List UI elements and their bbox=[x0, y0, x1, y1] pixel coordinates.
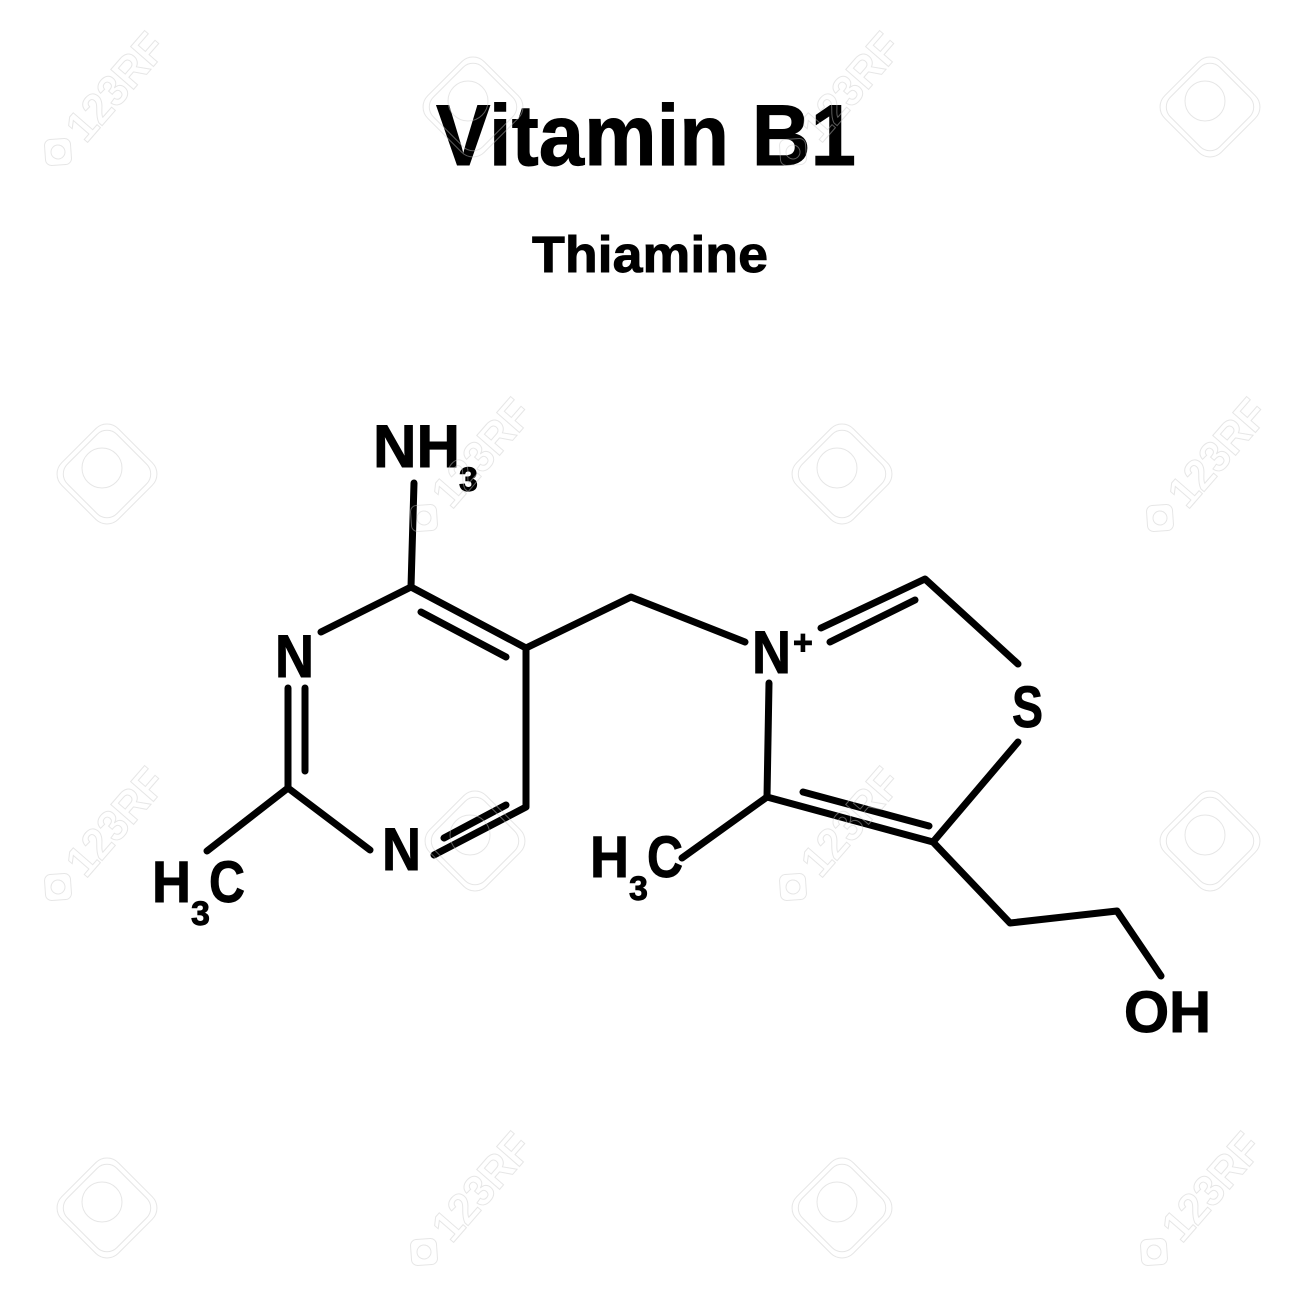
molecule bonds bbox=[207, 483, 1161, 976]
label: pyrimidine N lower: N bbox=[382, 816, 421, 883]
label: right H3C: H bbox=[590, 825, 629, 890]
label: right H3C: 3 bbox=[629, 870, 648, 908]
watermarks: 123RF bbox=[422, 1124, 542, 1251]
label: left H3C bbox=[152, 850, 245, 933]
label: left H3C: H bbox=[152, 850, 191, 915]
watermarks: 123RF bbox=[791, 24, 911, 151]
label: right H3C bbox=[590, 825, 683, 908]
watermarks: 123RF bbox=[1152, 1124, 1272, 1251]
label: NH3 bbox=[373, 413, 478, 499]
label: NH3: 3 bbox=[459, 461, 478, 499]
title: Vitamin B1 bbox=[436, 88, 856, 184]
watermarks: 123RF bbox=[422, 390, 542, 517]
watermarks: 123RF bbox=[791, 759, 911, 886]
label: left H3C: C bbox=[209, 850, 245, 915]
label: N+: + bbox=[793, 624, 813, 662]
watermarks: 123RF bbox=[56, 759, 176, 886]
label: OH: OH bbox=[1124, 980, 1211, 1045]
label: NH3: NH bbox=[373, 413, 460, 480]
label: pyrimidine N upper: N bbox=[275, 623, 314, 690]
label: S: S bbox=[1012, 675, 1043, 740]
label: left H3C: 3 bbox=[191, 895, 210, 933]
label: N+: N bbox=[752, 619, 791, 686]
subtitle: Thiamine bbox=[532, 226, 768, 283]
watermarks: 123RF bbox=[56, 24, 176, 151]
label: right H3C: C bbox=[647, 825, 683, 890]
watermarks: 123RF bbox=[1158, 390, 1278, 517]
